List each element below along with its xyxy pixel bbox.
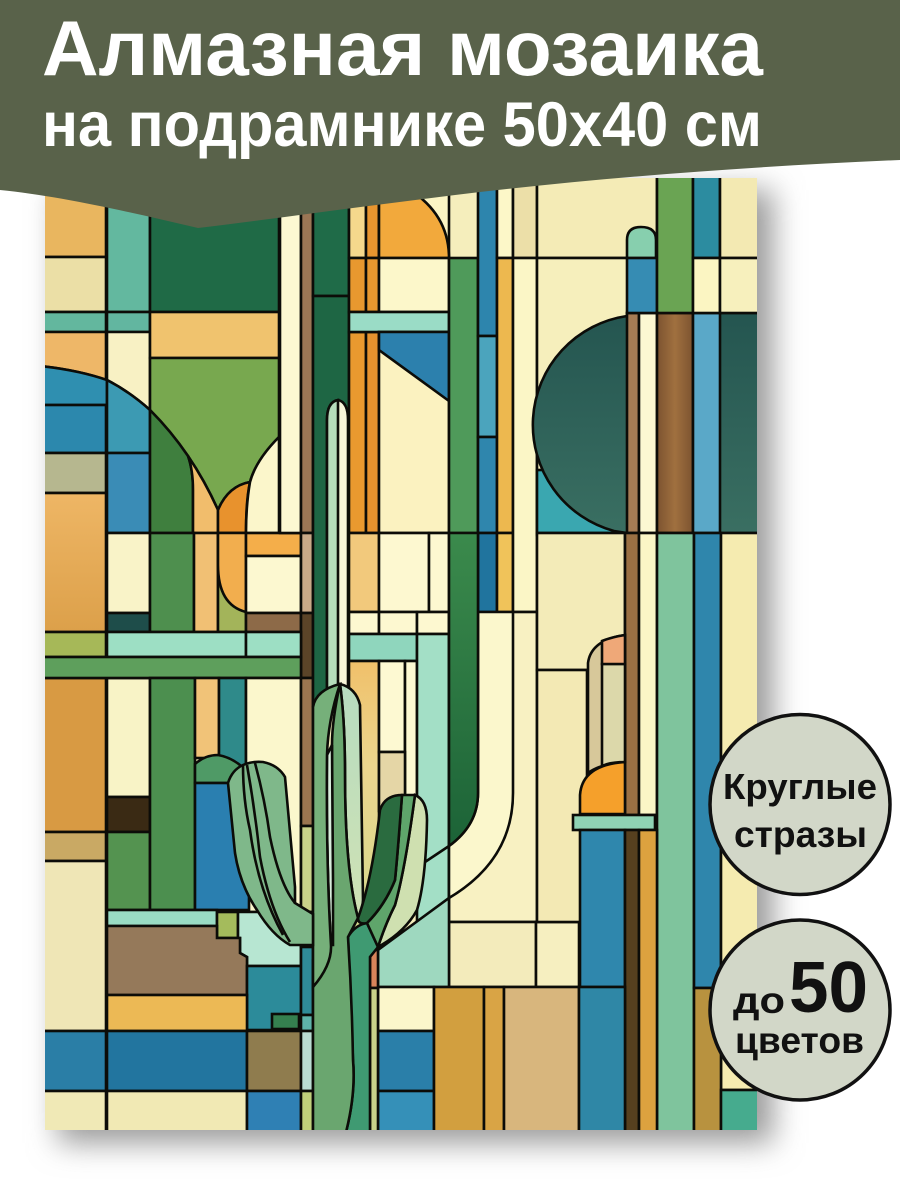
illustration: cactus [228, 400, 427, 1136]
badge: round rhinestones [710, 714, 890, 894]
painting: stained glass cactus [40, 170, 766, 1140]
cactus: left arm [228, 762, 313, 945]
badge: up to 50 colours: 50 [789, 948, 868, 1028]
badge: round rhinestones: Круглые [723, 766, 877, 807]
cactus: lower trunk, right band [348, 924, 378, 1130]
badge: up to 50 colours: до [733, 980, 785, 1021]
badge: up to 50 colours [710, 920, 890, 1100]
panel: bottom tiles [370, 950, 625, 1138]
panel: right side tiles [533, 170, 766, 1140]
badge: up to 50 colours: цветов [735, 1020, 864, 1061]
panel: lower left tiles [107, 678, 313, 1136]
panel: left column tiles [45, 196, 106, 1130]
banner [0, 0, 900, 228]
cactus: right arm [358, 795, 427, 947]
cactus: centre arm [313, 684, 363, 1136]
title: Алмазная мозаика [42, 4, 764, 92]
badge: round rhinestones: стразы [734, 814, 867, 855]
panel: centre orange and cream columns [313, 170, 449, 987]
panel: upper arches [45, 213, 312, 680]
subtitle: на подрамнике 50х40 см [42, 90, 762, 160]
cactus: narrow top arm [327, 400, 348, 700]
panel: tall green and blue columns [378, 170, 579, 987]
canvas shadow [58, 190, 773, 1143]
panel: second column tiles [107, 170, 150, 910]
